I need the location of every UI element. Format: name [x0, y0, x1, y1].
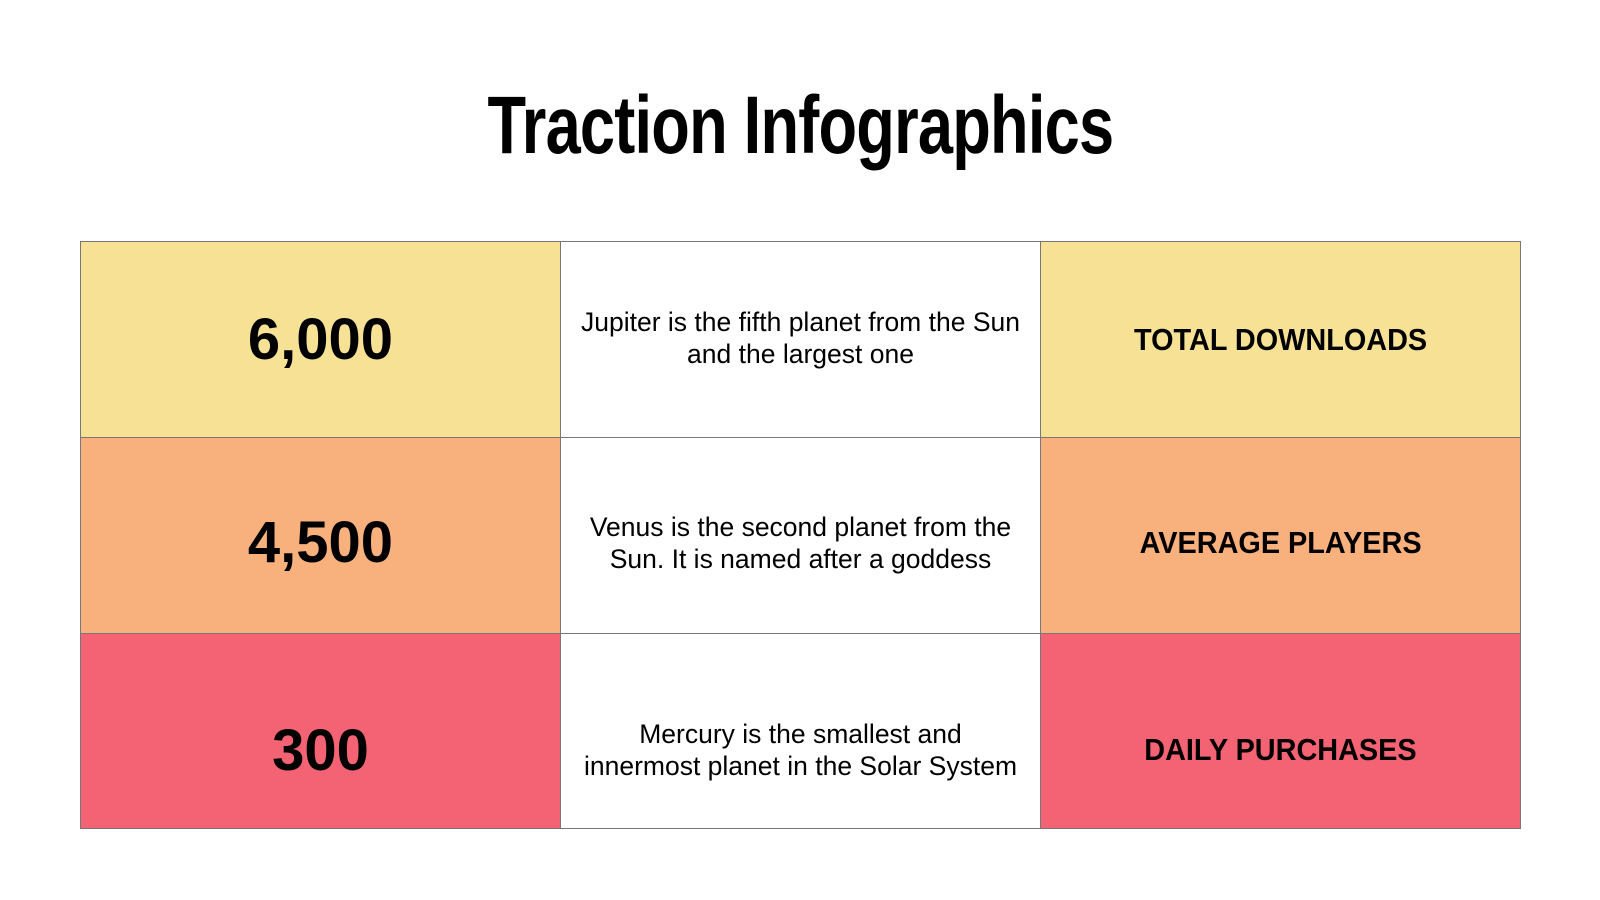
row 1 label [1040, 241, 1521, 438]
row 2 number [80, 437, 561, 634]
row 1 label: TOTAL DOWNLOADS [1134, 322, 1427, 356]
row 2 number: 4,500 [248, 510, 393, 575]
row 1 text: and the largest one [687, 338, 914, 368]
row 3 label: DAILY PURCHASES [1144, 732, 1417, 767]
row 3 text: innermost planet in the Solar System [584, 751, 1017, 781]
row 2 label [1040, 437, 1521, 634]
row 1 text [560, 241, 1041, 438]
row 1 number [80, 241, 561, 438]
row 3 text [560, 633, 1041, 829]
table [80, 241, 1521, 829]
row 2 text [560, 437, 1041, 634]
row 2 text: Sun. It is named after a goddess [610, 544, 991, 574]
row 1 text: Jupiter is the fifth planet from the Sun [581, 306, 1020, 336]
row 3 number [80, 633, 561, 829]
row 1 number: 6,000 [248, 307, 393, 372]
row 2 text: Venus is the second planet from the [590, 512, 1011, 542]
row 2 label: AVERAGE PLAYERS [1140, 524, 1421, 560]
title: Traction Infographics [487, 80, 1113, 171]
row 3 number: 300 [272, 718, 369, 782]
row 3 text: Mercury is the smallest and [639, 719, 962, 749]
row 3 label [1040, 633, 1521, 829]
